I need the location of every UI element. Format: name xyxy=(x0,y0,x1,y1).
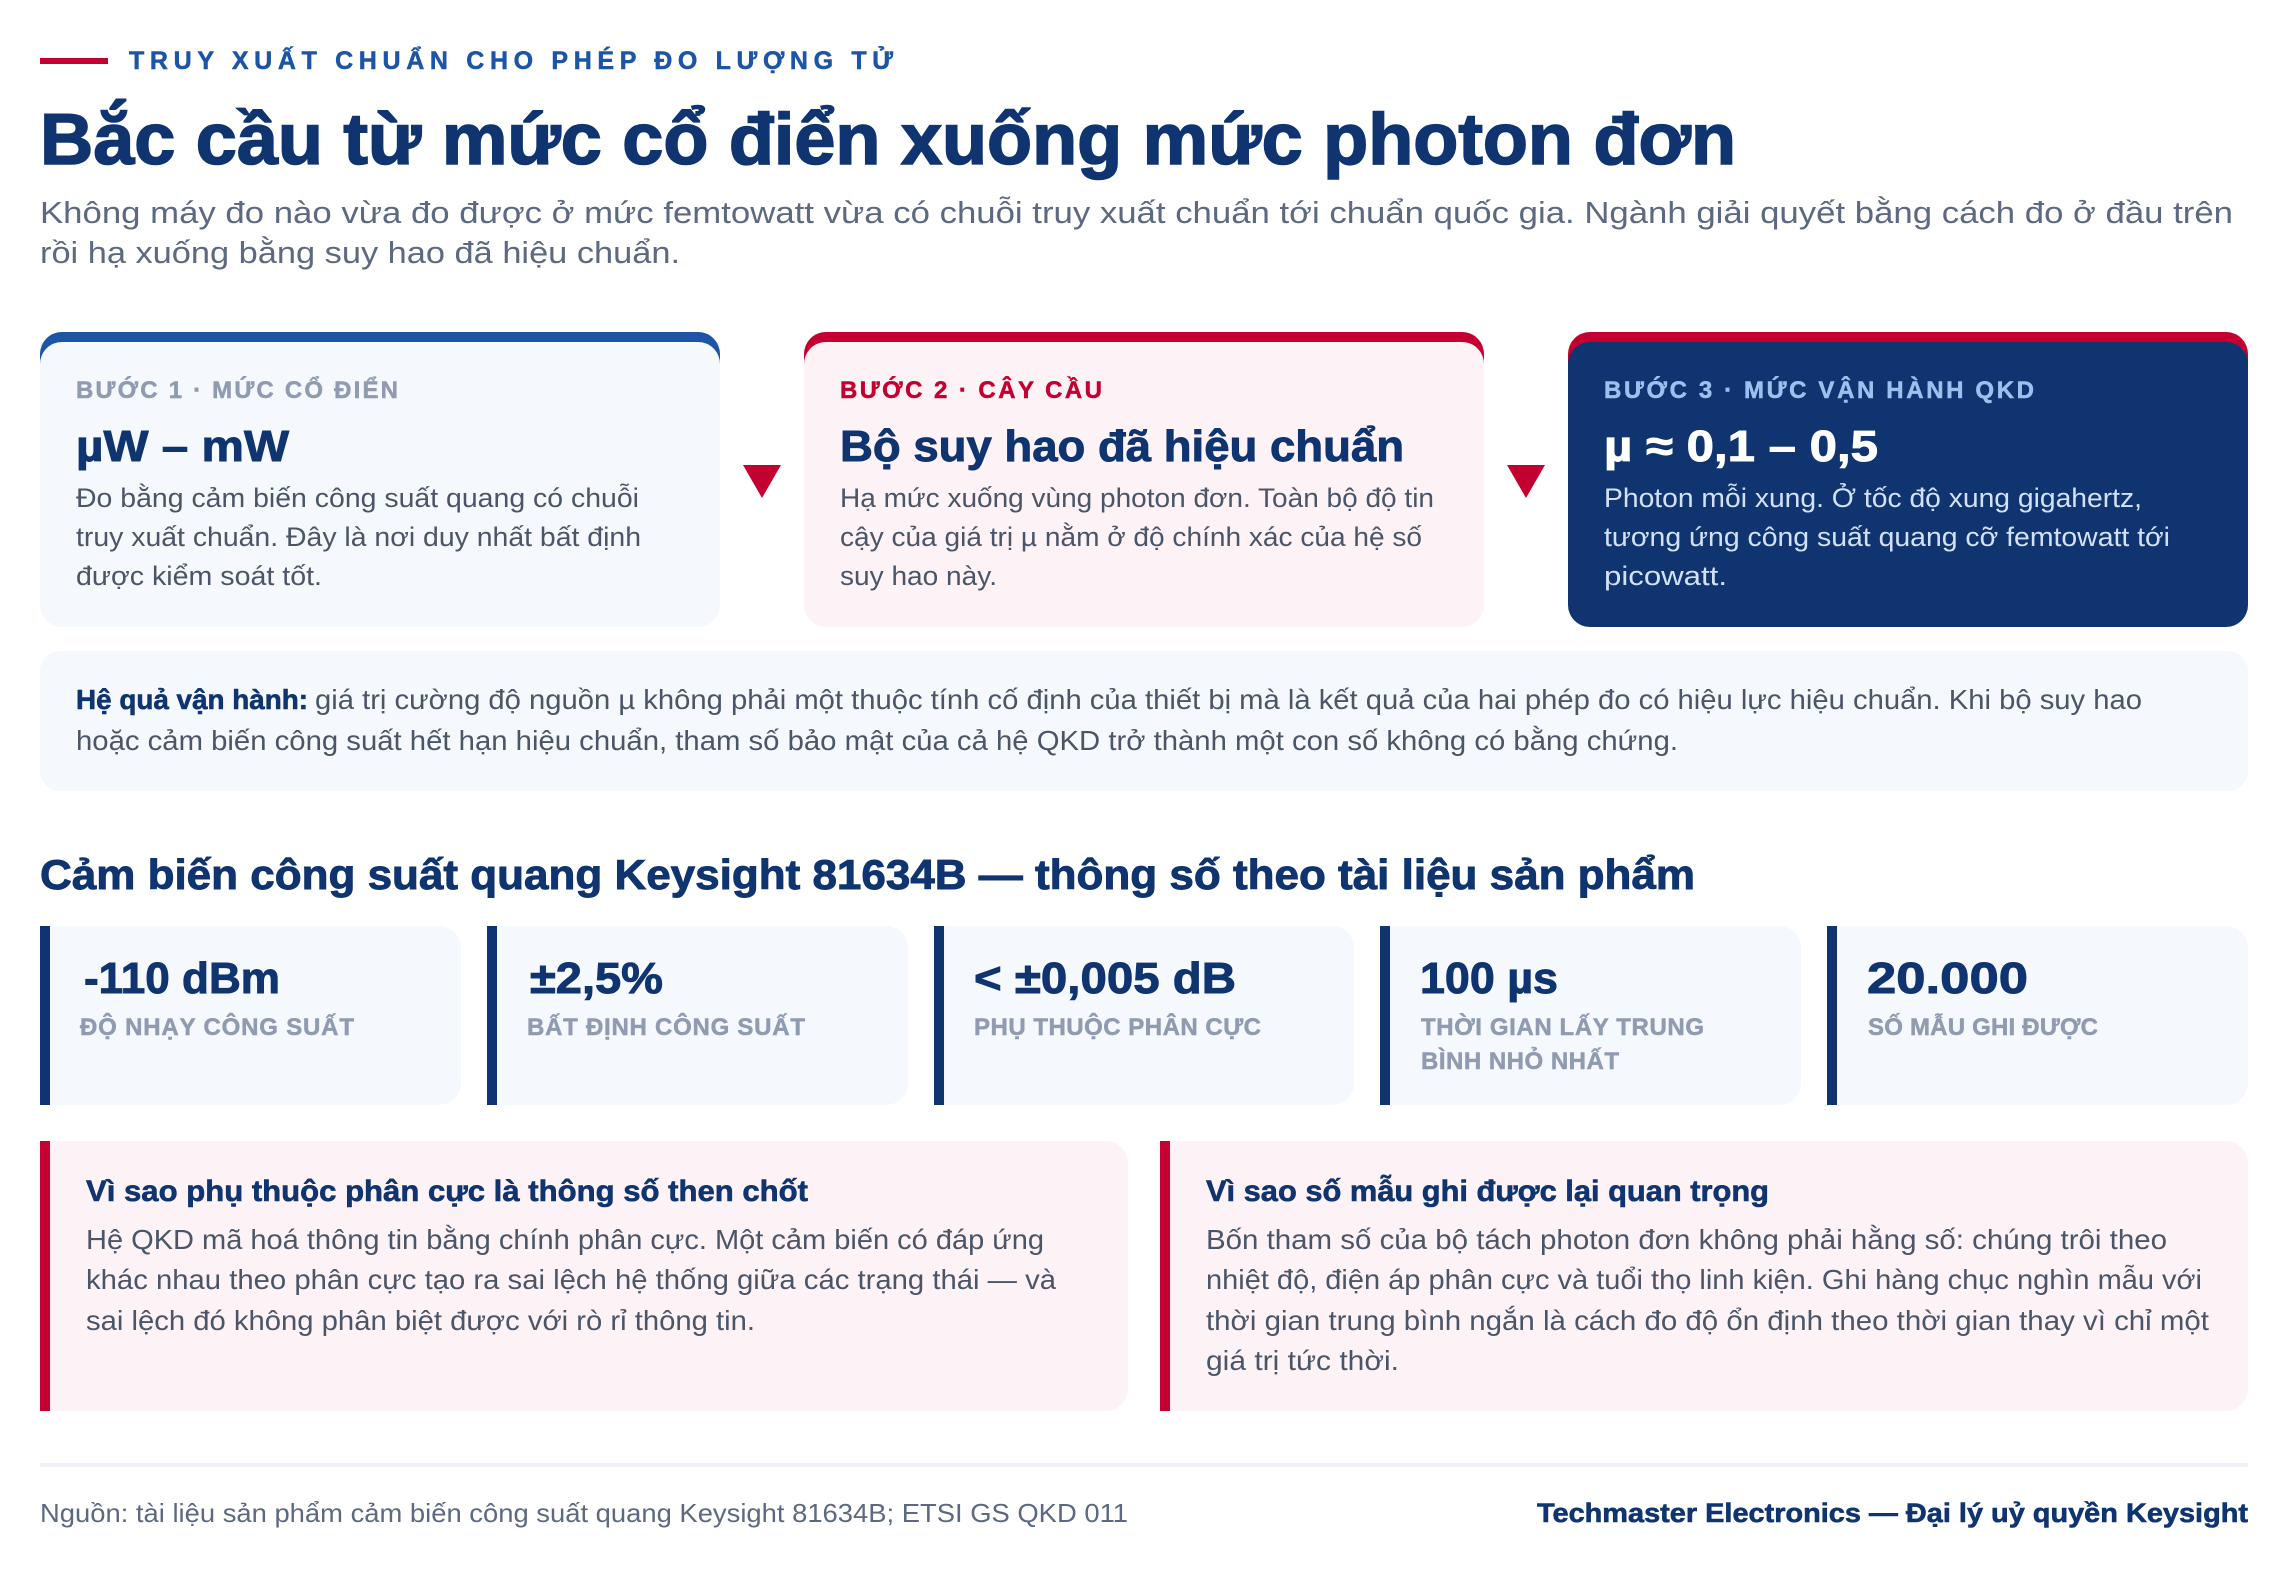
panel: operational consequence note: giá trị cường độ nguồn µ không phải một thuộc tính cố định của thiết bị mà là kết quả của hai phép đo có hiệu lực hiệu chuẩn. Khi bộ suy hao xyxy=(315,684,2142,715)
subtitle xyxy=(40,195,2233,270)
panel: why polarization dependence matters xyxy=(40,1141,1128,1411)
panel: why logged sample count matters: nhiệt độ, điện áp phân cực và tuổi thọ linh kiện. Ghi hàng chục nghìn mẫu với xyxy=(1206,1264,2202,1295)
panel: why logged sample count matters: Vì sao số mẫu ghi được lại quan trọng xyxy=(1206,1174,1769,1208)
panel: step 1: truy xuất chuẩn. Đây là nơi duy nhất bất định xyxy=(76,522,641,552)
panel: operational consequence note xyxy=(40,651,2248,791)
panel: why logged sample count matters: thời gian trung bình ngắn là cách đo độ ổn định theo thời gian thay vì chỉ một xyxy=(1206,1305,2209,1336)
panel: step 3: picowatt. xyxy=(1604,561,1727,591)
subtitle: Không máy đo nào vừa đo được ở mức femtowatt vừa có chuỗi truy xuất chuẩn tới chuẩn quốc gia. Ngành giải quyết bằng cách đo ở đầu trên xyxy=(40,195,2233,230)
panel: step 2: Bộ suy hao đã hiệu chuẩn xyxy=(840,422,1404,471)
distributor credit: Techmaster Electronics — Đại lý uỷ quyền Keysight xyxy=(1537,1498,2248,1528)
title: Bắc cầu từ mức cổ điển xuống mức photon đơn xyxy=(40,99,1736,180)
spec: sensitivity: ĐỘ NHẠY CÔNG SUẤT xyxy=(80,1013,354,1041)
panel: why logged sample count matters xyxy=(1160,1141,2248,1411)
panel: operational consequence note: hoặc cảm biến công suất hết hạn hiệu chuẩn, tham số bảo mật của cả hệ QKD trở thành một con số không có bằng chứng. xyxy=(76,725,1678,756)
panel: step 1 xyxy=(40,332,720,627)
header xyxy=(40,45,2233,270)
panel: why logged sample count matters: giá trị tức thời. xyxy=(1206,1345,1399,1376)
panel: step 3 xyxy=(1568,332,2248,627)
subtitle: rồi hạ xuống bằng suy hao đã hiệu chuẩn. xyxy=(40,235,680,270)
spec: logged samples: SỐ MẪU GHI ĐƯỢC xyxy=(1868,1012,2098,1041)
source note: Nguồn: tài liệu sản phẩm cảm biến công suất quang Keysight 81634B; ETSI GS QKD 011 xyxy=(40,1498,1128,1528)
spec: uncertainty: ±2,5% xyxy=(530,954,663,1003)
spec: logged samples xyxy=(1827,926,2248,1105)
section heading: Cảm biến công suất quang Keysight 81634B — thông số theo tài liệu sản phẩm xyxy=(40,851,1695,898)
panel: step 3: µ ≈ 0,1 – 0,5 xyxy=(1604,422,1878,471)
panel: step 3: Photon mỗi xung. Ở tốc độ xung gigahertz, xyxy=(1604,483,2142,513)
panel: operational consequence note: Hệ quả vận hành: xyxy=(76,684,308,715)
spec: sensitivity xyxy=(40,926,461,1105)
spec: logged samples: 20.000 xyxy=(1867,954,2028,1003)
spec: uncertainty: BẤT ĐỊNH CÔNG SUẤT xyxy=(527,1013,805,1041)
panel: step 1: Đo bằng cảm biến công suất quang có chuỗi xyxy=(76,483,639,513)
arrow: step 2 to step 3 xyxy=(1507,465,1545,498)
spec: polarization dependence xyxy=(934,926,1354,1105)
panel: step 3: tương ứng công suất quang cỡ femtowatt tới xyxy=(1604,522,2170,552)
spec: minimum averaging time: 100 µs xyxy=(1420,954,1558,1003)
spec: minimum averaging time: BÌNH NHỎ NHẤT xyxy=(1421,1046,1619,1075)
panel: step 1: µW – mW xyxy=(76,422,290,471)
footer xyxy=(40,1498,2248,1528)
panel: step 1: được kiểm soát tốt. xyxy=(76,561,322,591)
arrow: step 1 to step 2 xyxy=(743,465,781,498)
panel: why logged sample count matters: Bốn tham số của bộ tách photon đơn không phải hằng số: chúng trôi theo xyxy=(1206,1224,2167,1255)
spec: minimum averaging time xyxy=(1380,926,1801,1105)
panel: why polarization dependence matters: khác nhau theo phân cực tạo ra sai lệch hệ thống giữa các trạng thái — và xyxy=(86,1264,1056,1295)
eyebrow: TRUY XUẤT CHUẨN CHO PHÉP ĐO LƯỢNG TỬ xyxy=(129,45,893,75)
spec: polarization dependence: < ±0,005 dB xyxy=(974,954,1236,1003)
panel: step 2: cậy của giá trị µ nằm ở độ chính xác của hệ số xyxy=(840,522,1422,552)
panel: step 3: BƯỚC 3 · MỨC VẬN HÀNH QKD xyxy=(1604,376,2034,404)
panel: step 2 xyxy=(804,332,1484,627)
panel: step 2: Hạ mức xuống vùng photon đơn. Toàn bộ độ tin xyxy=(840,483,1434,513)
panel: step 2: BƯỚC 2 · CÂY CẦU xyxy=(840,376,1102,404)
spec: polarization dependence: PHỤ THUỘC PHÂN CỰC xyxy=(974,1013,1261,1041)
panel: why polarization dependence matters: sai lệch đó không phân biệt được với rò rỉ thông tin. xyxy=(86,1305,755,1336)
spec: minimum averaging time: THỜI GIAN LẤY TRUNG xyxy=(1421,1013,1704,1041)
panel: why polarization dependence matters: Hệ QKD mã hoá thông tin bằng chính phân cực. Một cảm biến có đáp ứng xyxy=(86,1224,1044,1255)
panel: step 1: BƯỚC 1 · MỨC CỔ ĐIỂN xyxy=(76,376,398,404)
panel: why polarization dependence matters: Vì sao phụ thuộc phân cực là thông số then chốt xyxy=(86,1175,808,1208)
spec row xyxy=(40,926,2248,1105)
spec: uncertainty xyxy=(487,926,908,1105)
panel: step 2: suy hao này. xyxy=(840,561,997,591)
spec: sensitivity: -110 dBm xyxy=(84,954,280,1003)
